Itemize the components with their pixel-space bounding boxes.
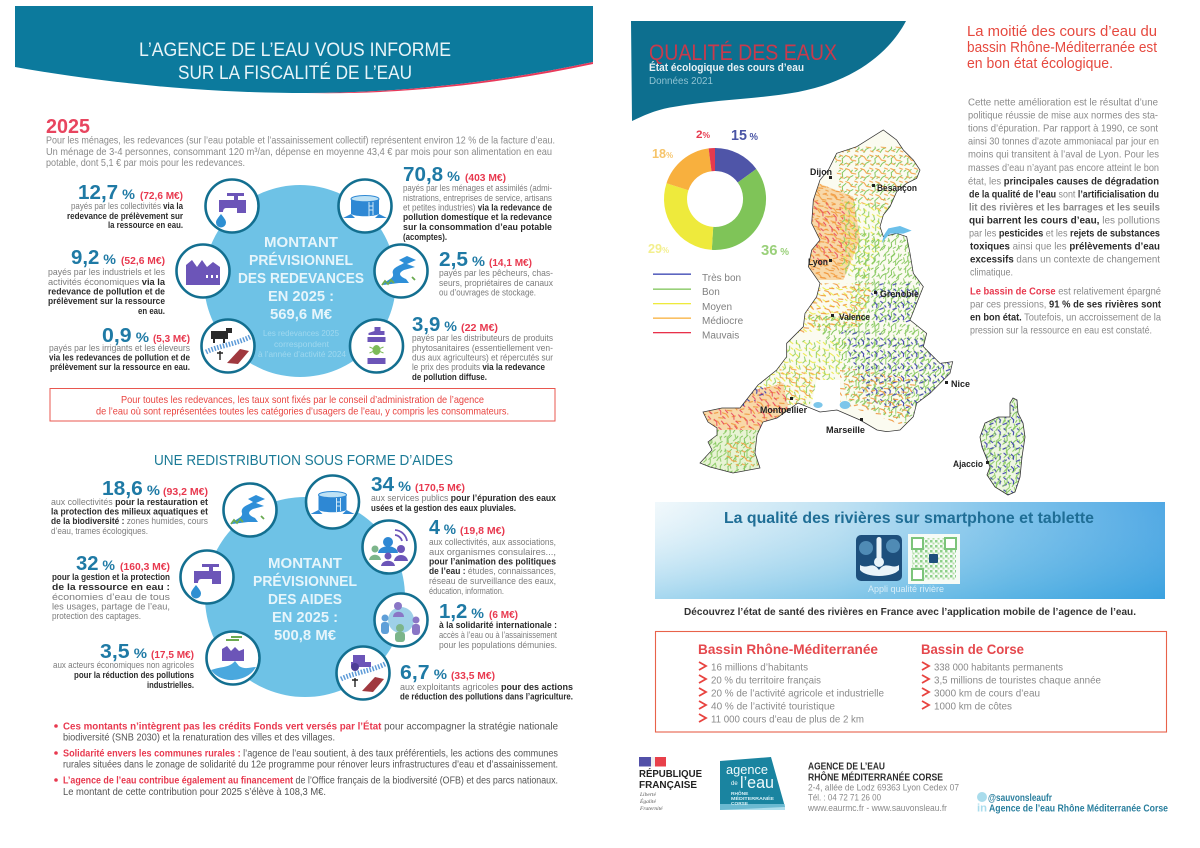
legend: Médiocre: [702, 316, 744, 327]
Bassin de Corse: 3,5 millions de touristes chaque année: [934, 674, 1101, 686]
bloc 0,9 %: [49, 325, 190, 373]
bloc 18,6 %: 18,6 %: [102, 478, 161, 500]
banner: qualité des eaux: État écologique des cours d’eau: [649, 61, 804, 74]
bloc 4 %: (19,8 M€): [460, 525, 505, 537]
callout: taux des redevances: de l’eau où sont représentées toutes les catégories d’usagers de l’eau, y compris les consommateurs.: [96, 406, 509, 418]
Bassin Rhône-Méditerranée: 20 % de l’activité agricole et industrielle: [711, 688, 884, 700]
bloc 34 %: [371, 474, 557, 514]
Bassin de Corse: [921, 641, 1101, 712]
adresse: [807, 762, 959, 814]
heading: moitié des cours d'eau: en bon état écologique.: [967, 56, 1113, 72]
Bassin Rhône-Méditerranée: 20 % du territoire français: [711, 674, 821, 686]
bloc 4 %: aux collectivités, aux associations,: [429, 537, 556, 548]
bloc 70,8 %: [403, 164, 552, 243]
text block: bassin de Corse: Le bassin de Corse est relativement épargné: [970, 286, 1161, 298]
panel: montant des aides: EN 2025 :: [272, 610, 338, 626]
icon: bassin: [338, 180, 392, 232]
Bassin Rhône-Méditerranée: 16 millions d’habitants: [711, 662, 808, 674]
text block: amélioration: lit des rivières et les barrages et les seuils: [969, 202, 1160, 214]
bloc 18,6 %: (93,2 M€): [163, 486, 208, 498]
bloc 32 %: les usages, partage de l’eau,: [52, 602, 170, 612]
logo: République française: [639, 757, 702, 812]
bloc 4 %: éducation, information.: [429, 586, 504, 597]
text block: amélioration: moins qui transitent à l’aval de Lyon. Pour les: [968, 148, 1159, 160]
bloc 70,8 %: payés par les ménages et assimilés (admi-: [403, 183, 552, 194]
text block: amélioration: Cette nette amélioration est le résultat d’une: [968, 96, 1158, 108]
bloc 70,8 %: (acomptes).: [403, 232, 447, 243]
Bassin Rhône-Méditerranée: Bassin Rhône-Méditerranée: [698, 641, 878, 657]
bloc 12,7 %: (72,6 M€): [140, 190, 183, 202]
logo: agence de l'eau: CORSE: [731, 801, 749, 807]
bloc 9,2 %: (52,6 M€): [121, 255, 165, 267]
callout: taux des redevances: [50, 388, 555, 421]
logo: République française: RÉPUBLIQUE: [639, 767, 702, 780]
Bassin Rhône-Méditerranée: 11 000 cours d’eau de plus de 2 km: [711, 714, 864, 726]
bloc 32 %: pour la gestion et la protection: [52, 572, 170, 583]
introduction 2025: Pour les ménages, les redevances (sur l’eau potable et l’assainissement collectif) représentent environ 12 % de la facture d’eau.: [46, 134, 555, 146]
bloc 0,9 %: 0,9 %: [102, 325, 150, 347]
bloc 32 %: 32 %: [76, 553, 116, 575]
icon: robinet: [180, 550, 234, 604]
introduction 2025: Un ménage de 3-4 personnes, consommant 120 m³/an, dépense en moyenne 43,4 € par mois pour son alimentation en eau: [46, 146, 552, 158]
icon: bassin: [306, 476, 359, 528]
bloc 12,7 %: 12,7 %: [78, 182, 136, 204]
bloc 3,9 %: payés par les distributeurs de produits: [412, 333, 553, 344]
donut chart: 15 %: [731, 127, 758, 144]
icon: réseau d'acteurs: [362, 520, 416, 574]
panel: montant des redevances: MONTANT: [264, 235, 338, 251]
panel: application mobile: [655, 502, 1165, 599]
logo: agence de l'eau: MÉDITERRANÉE: [731, 794, 775, 802]
donut chart: 36 %: [761, 242, 789, 259]
bloc 34 %: usées et la gestion des eaux pluviales.: [371, 503, 516, 514]
text block: amélioration: de la qualité de l’eau sont l’artificialisation du: [969, 188, 1159, 200]
bloc 2,5 %: seurs, propriétaires de canaux: [439, 278, 553, 289]
map: villes: Besançon: [877, 183, 917, 194]
panel: montant des redevances: EN 2025 :: [268, 289, 334, 305]
bloc 3,9 %: 3,9 %: [412, 314, 458, 336]
banner: qualité des eaux: [631, 21, 906, 121]
bloc 70,8 %: (403 M€): [465, 172, 506, 184]
Bassin Rhône-Méditerranée: [698, 641, 884, 726]
notes: Solidarité envers les communes rurales : l’agence de l’eau soutient, à des taux préférentiels, les actions des communes: [63, 748, 558, 760]
bloc 12,7 %: la ressource en eau.: [108, 220, 183, 231]
bloc 18,6 %: d’eau, trames écologiques.: [51, 526, 148, 537]
map: villes: Nice: [951, 379, 970, 390]
bloc 9,2 %: 9,2 %: [71, 247, 117, 269]
heading: redistribution: UNE REDISTRIBUTION SOUS FORME D’AIDES: [154, 452, 453, 469]
text block: amélioration: qui barrent les cours d’eau, les pollutions: [969, 214, 1160, 226]
text block: amélioration: excessifs dans un contexte de changement: [970, 254, 1160, 266]
bloc 0,9 %: prélèvement sur la ressource en eau.: [50, 362, 190, 373]
map: bassin Rhône-Méditerranée: [693, 127, 1037, 497]
Bassin de Corse: Bassin de Corse: [921, 641, 1024, 657]
panel: montant des redevances: DES REDEVANCES: [238, 271, 364, 287]
bloc 3,9 %: dus aux agriculteurs) et répercutés sur: [412, 352, 553, 364]
donut chart: 29%: [648, 241, 669, 256]
bloc 3,5 %: pour la réduction des pollutions: [74, 670, 194, 681]
bloc 3,5 %: 3,5 %: [100, 641, 148, 663]
Bassin de Corse: 1000 km de côtes: [934, 700, 1012, 712]
bloc 9,2 %: redevance de pollution et de: [48, 286, 165, 298]
text block: bassin de Corse: pression sur la ressource en eau est constaté.: [970, 324, 1152, 336]
icon: usine: [176, 244, 230, 298]
icon: application: [856, 535, 902, 581]
text block: amélioration: masses d’eau n’ayant pas encore atteint le bon: [968, 162, 1159, 174]
bloc 34 %: aux services publics pour l’épuration des eaux: [371, 493, 557, 504]
bloc 32 %: économies d’eau de tous: [52, 592, 170, 603]
map: Corse: [980, 398, 1026, 496]
text block: amélioration: par les pesticides et les rejets de substances: [969, 228, 1160, 240]
text block: amélioration: tions d’épuration. Par rapport à 1990, ce sont: [968, 122, 1158, 134]
panel: chiffres clés: [656, 632, 1166, 732]
icon: exploitation agricole: [336, 646, 390, 700]
icon: réduction pollution industrielle: [206, 632, 260, 684]
icon: solidarité internationale: [374, 594, 428, 646]
réseaux sociaux: in: [977, 802, 987, 814]
callout: taux des redevances: Pour toutes les redevances, les taux sont fixés par le conseil d’administration de l’agence: [121, 394, 484, 406]
panel: montant des aides: MONTANT: [268, 556, 342, 572]
map: villes: Dijon: [810, 167, 832, 178]
legend: Mauvais: [702, 330, 739, 342]
bloc 0,9 %: (5,3 M€): [153, 333, 190, 345]
icon: robinet: [206, 180, 258, 232]
bloc 3,9 %: le prix des produits via la redevance: [412, 362, 545, 373]
bloc 4 %: pour l’animation des politiques: [429, 556, 556, 568]
bloc 6,7 %: [400, 662, 573, 702]
panel: montant des redevances: PRÉVISIONNEL: [249, 252, 353, 269]
panel: application mobile: Appli qualité rivière: [868, 584, 944, 595]
text block: amélioration: toxiques ainsi que les prélèvements d’eau: [970, 240, 1160, 252]
bloc 4 %: réseau de surveillance des eaux,: [429, 576, 556, 587]
bloc 1,2 %: à la solidarité internationale :: [439, 620, 557, 631]
bloc 2,5 %: payés par les pêcheurs, chas-: [439, 268, 553, 279]
donut chart: 18%: [652, 146, 673, 161]
bloc 3,5 %: (17,5 M€): [151, 649, 194, 661]
bloc 6,7 %: (33,5 M€): [451, 670, 495, 682]
bloc 32 %: de la ressource en eau :: [52, 582, 170, 593]
panel: montant des redevances: 569,6 M€: [270, 307, 332, 323]
bloc 6,7 %: de réduction des pollutions dans l’agriculture.: [400, 692, 573, 702]
text block: amélioration: climatique.: [970, 266, 1013, 278]
icon: rivière: [374, 244, 428, 298]
Bassin de Corse: 338 000 habitants permanents: [934, 662, 1063, 674]
panel: montant des aides: [205, 497, 405, 697]
legend: Bon: [702, 287, 720, 298]
bloc 0,9 %: via les redevances de pollution et de: [49, 352, 190, 364]
Bassin Rhône-Méditerranée: 40 % de l’activité touristique: [711, 700, 835, 712]
panel: montant des redevances: Les redevances 2025: [263, 328, 339, 338]
adresse: Tél. : 04 72 71 26 00: [808, 792, 881, 804]
bloc 70,8 %: sur la consommation d’eau potable: [403, 222, 552, 233]
logo: agence de l'eau: RHÔNE: [731, 789, 749, 797]
legend: [653, 273, 744, 342]
banner: fiscalité de l'eau: L’AGENCE DE L’EAU VOUS INFORME: [139, 39, 451, 61]
map: villes: Grenoble: [880, 289, 919, 300]
panel: montant des redevances: à l’année d’activité 2024: [258, 349, 346, 359]
introduction 2025: potable, dont 5,1 € par mois pour les redevances.: [46, 157, 245, 169]
icon: élevage et irrigation: [202, 320, 254, 372]
banner: fiscalité de l'eau: [15, 6, 593, 93]
map: villes: Valence: [839, 312, 870, 323]
panel: montant des redevances: [204, 185, 396, 377]
introduction 2025: [46, 116, 555, 169]
bloc 18,6 %: de la biodiversité : zones humides, cours: [51, 516, 208, 527]
icon: rivière: [224, 484, 276, 536]
bloc 3,9 %: phytosanitaires (essentiellement ven-: [412, 343, 553, 354]
notes: [54, 720, 558, 798]
icon: produit phytosanitaire: [350, 320, 403, 372]
bloc 32 %: (160,3 M€): [120, 561, 170, 573]
bloc 2,5 %: [439, 249, 553, 298]
map: villes: Montpellier: [760, 405, 807, 416]
introduction 2025: 2025: [46, 116, 90, 138]
bloc 34 %: (170,5 M€): [415, 482, 465, 494]
bloc 3,9 %: (22 M€): [461, 322, 498, 334]
notes: rurales situées dans le zonage de solidarité du 12e programme pour rénover leurs infrastructures d’eau et d’assainissement.: [63, 760, 558, 770]
heading: moitié des cours d'eau: La moitié des cours d’eau du: [967, 24, 1157, 40]
donut chart: 2%: [696, 129, 710, 141]
map: villes: Marseille: [826, 425, 865, 436]
bloc 9,2 %: en eau.: [138, 306, 165, 317]
logo: République française: Égalité: [639, 797, 656, 805]
map: villes: [760, 167, 989, 470]
bloc 1,2 %: [439, 601, 557, 651]
banner: qualité des eaux: Données 2021: [649, 75, 713, 87]
bloc 32 %: protection des captages.: [52, 611, 141, 622]
bloc 70,8 %: 70,8 %: [403, 164, 461, 186]
logo: République française: Liberté: [639, 792, 656, 798]
bloc 3,5 %: [53, 641, 194, 691]
adresse: RHÔNE MÉDITERRANÉE CORSE: [808, 770, 943, 784]
bloc 32 %: [52, 553, 170, 622]
legend: Très bon: [702, 273, 741, 284]
text block: bassin de Corse: en bon état. Toutefois, un accroissement de la: [970, 312, 1161, 324]
bloc 18,6 %: la protection des milieux aquatiques et: [51, 506, 209, 518]
legend: Moyen: [702, 302, 732, 313]
bloc 3,5 %: aux acteurs économiques non agricoles: [53, 660, 194, 671]
logo: agence de l'eau: de: [731, 781, 738, 787]
bloc 9,2 %: activités économiques via la: [48, 277, 166, 288]
bloc 4 %: de l’eau : études, connaissances,: [429, 566, 556, 577]
bloc 9,2 %: [48, 247, 166, 317]
bloc 2,5 %: ou d’ouvrages de stockage.: [439, 288, 536, 298]
map: villes: Ajaccio: [953, 459, 983, 470]
bloc 4 %: [429, 517, 556, 597]
text block: amélioration: [968, 96, 1160, 278]
bloc 18,6 %: aux collectivités pour la restauration et: [51, 497, 209, 508]
bloc 3,9 %: [412, 314, 553, 383]
logo: agence de l'eau: [720, 757, 785, 810]
bloc 9,2 %: prélèvement sur la ressource: [48, 296, 165, 307]
text block: bassin de Corse: par ces pressions, 91 % de ses rivières sont: [970, 298, 1161, 310]
bloc 1,2 %: 1,2 %: [439, 601, 485, 623]
notes: Le montant de cette contribution pour 2025 s’élève à 108,3 M€.: [63, 787, 326, 798]
logo: agence de l'eau: agence: [726, 762, 768, 777]
bloc 2,5 %: 2,5 %: [439, 249, 486, 271]
bloc 3,9 %: de pollution diffuse.: [412, 372, 487, 383]
bloc 70,8 %: pollution domestique et la redevance: [403, 212, 552, 223]
text block: amélioration: ainsi 30 tonnes d’azote ammoniacal par jour en: [968, 136, 1159, 148]
panel: montant des redevances: correspondent: [274, 339, 330, 349]
bloc 2,5 %: (14,1 M€): [489, 257, 532, 269]
logo: République française: FRANÇAISE: [639, 779, 697, 791]
lac Léman: [882, 226, 912, 243]
panel: montant des aides: PRÉVISIONNEL: [253, 573, 357, 590]
map: villes: Lyon: [808, 257, 828, 268]
heading: moitié des cours d'eau: [967, 24, 1157, 72]
bloc 1,2 %: (6 M€): [489, 609, 518, 621]
bloc 6,7 %: 6,7 %: [400, 662, 448, 684]
panel: application mobile: La qualité des rivières sur smartphone et tablette: [724, 510, 1094, 527]
adresse: 2-4, allée de Lodz 69363 Lyon Cedex 07: [808, 782, 959, 794]
notes: L’agence de l’eau contribue également au financement de l’Office français de la biodiversité (OFB) et des parcs nationaux.: [63, 776, 558, 786]
Bassin de Corse: 3000 km de cours d’eau: [934, 688, 1040, 700]
bloc 18,6 %: [51, 478, 209, 537]
réseaux sociaux: @sauvonsleaufr: [988, 793, 1052, 804]
panel: montant des aides: DES AIDES: [268, 592, 342, 608]
panel: montant des aides: 500,8 M€: [274, 628, 336, 644]
logo: agence de l'eau: l’eau: [740, 773, 774, 792]
bloc 1,2 %: accès à l’eau ou à l’assainissement: [439, 630, 557, 641]
bloc 3,5 %: industrielles.: [147, 680, 194, 691]
donut chart: [648, 127, 789, 259]
bloc 12,7 %: payés par les collectivités via la: [71, 201, 184, 212]
bloc 34 %: 34 %: [371, 474, 412, 496]
QR code: [908, 534, 960, 584]
notes: Ces montants n’intègrent pas les crédits Fonds vert versés par l’État pour accompagner la stratégie nationale: [63, 720, 558, 732]
banner: fiscalité de l'eau: SUR LA FISCALITÉ DE L’EAU: [178, 61, 412, 84]
bloc 70,8 %: nistrations, entreprises de service, artisans: [403, 193, 552, 204]
bloc 1,2 %: pour les populations démunies.: [439, 640, 557, 651]
logo: République française: Fraternité: [639, 806, 663, 812]
adresse: AGENCE DE L’EAU: [808, 762, 885, 772]
heading: moitié des cours d'eau: bassin Rhône-Méditerranée est: [967, 40, 1157, 56]
bloc 9,2 %: payés par les industriels et les: [48, 267, 165, 278]
bloc 4 %: 4 %: [429, 517, 457, 539]
bloc 70,8 %: et petites industries) via la redevance de: [403, 202, 552, 214]
text block: amélioration: politique réussie de mise aux normes des sta-: [968, 110, 1158, 122]
text block: bassin de Corse: [970, 286, 1161, 336]
notes: biodiversité (SNB 2030) et la renaturation des villes et des villages.: [63, 732, 335, 744]
réseaux sociaux: [977, 792, 1168, 814]
bloc 4 %: aux organismes consulaires...,: [429, 547, 556, 558]
réseaux sociaux: Agence de l’eau Rhône Méditerranée Corse: [989, 804, 1168, 814]
bloc 12,7 %: [67, 182, 184, 231]
text block: amélioration: état, les principales causes de dégradation: [968, 176, 1159, 188]
bloc 0,9 %: payés par les irrigants et les éleveurs: [49, 343, 190, 354]
text: découvrez l'application: Découvrez l’état de santé des rivières en France avec l’application mobile de l’agence de l’eau.: [684, 606, 1136, 618]
bloc 6,7 %: aux exploitants agricoles pour des actions: [400, 682, 573, 693]
bloc 12,7 %: redevance de prélèvement sur: [67, 211, 183, 222]
adresse: www.eaurmc.fr - www.sauvonsleau.fr: [807, 803, 947, 814]
banner: qualité des eaux: QUALITÉ DES EAUX: [649, 40, 837, 65]
